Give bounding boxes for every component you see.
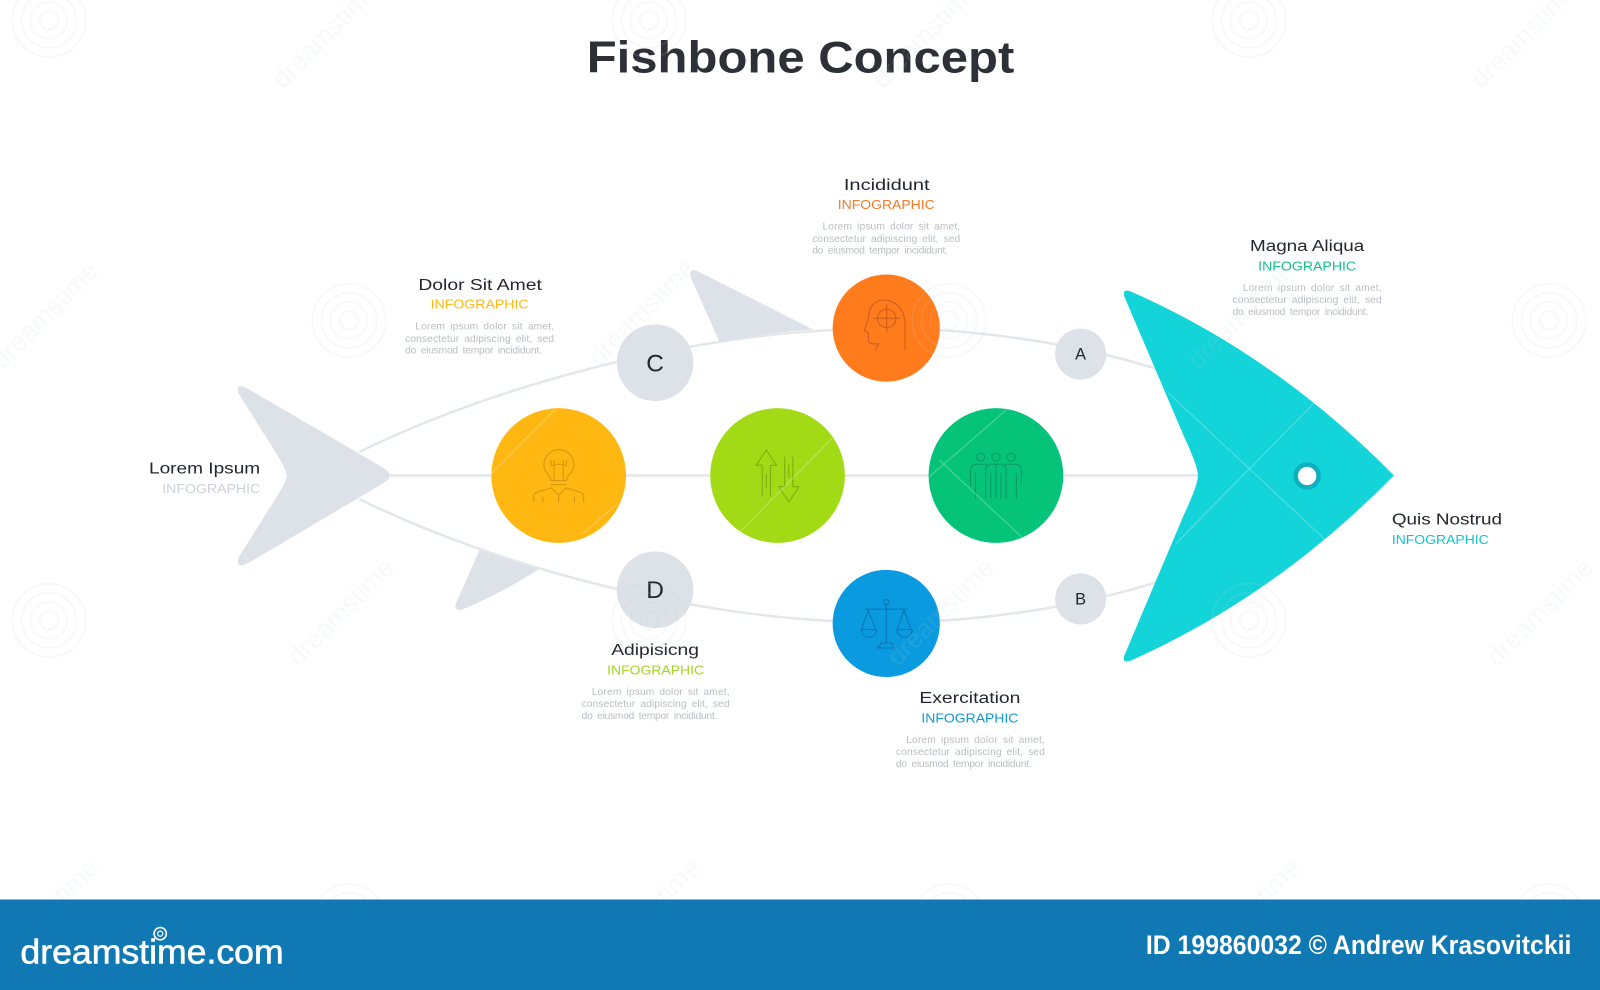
label: Dolor Sit Amet: INFOGRAPHIC (431, 297, 529, 312)
label: Lorem Ipsum: Lorem Ipsum (149, 460, 260, 477)
label: Adipisicng (582, 642, 730, 722)
circle: lime arrows (710, 408, 845, 543)
footer band (0, 899, 1600, 990)
icon: lightbulb person (534, 450, 584, 502)
label: Dolor Sit Amet: do eiusmod tempor incididunt. (405, 346, 542, 357)
fish head (1124, 291, 1394, 661)
tail fin (238, 386, 390, 565)
footer logo: dreamstime.com (20, 933, 284, 971)
badge B: B (1075, 591, 1086, 609)
label: Quis Nostrud: INFOGRAPHIC (1392, 532, 1489, 547)
label: Incididunt: Lorem ipsum dolor sit amet, (822, 222, 960, 233)
label: Exercitation: do eiusmod tempor incididunt. (896, 759, 1032, 770)
label: Incididunt: do eiusmod tempor incididunt. (812, 246, 948, 257)
icon: head with crosshair (864, 300, 905, 350)
text: dreamstime (1181, 255, 1300, 375)
icon: up and down arrows (756, 450, 799, 502)
label: Adipisicng: consectetur adipiscing elit, sed (582, 699, 730, 710)
label: Exercitation (896, 690, 1045, 770)
label: Quis Nostrud: Quis Nostrud (1392, 511, 1502, 528)
label: Dolor Sit Amet: Lorem ipsum dolor sit amet, (415, 322, 554, 333)
label: Incididunt: INFOGRAPHIC (838, 197, 935, 212)
label: Magna Aliqua (1233, 238, 1382, 318)
label: Magna Aliqua: Lorem ipsum dolor sit amet, (1243, 283, 1382, 294)
text: dreamstime (587, 852, 706, 972)
label: Dolor Sit Amet: consectetur adipiscing elit, sed (405, 334, 554, 345)
label: Quis Nostrud (1392, 511, 1502, 547)
circle: blue scales (833, 570, 940, 677)
text: dreamstime (1480, 552, 1599, 672)
label: Adipisicng: Adipisicng (611, 642, 699, 659)
lower fin (455, 550, 539, 610)
label: Lorem Ipsum (149, 460, 261, 496)
badge D (617, 552, 693, 628)
label: Lorem Ipsum: INFOGRAPHIC (162, 481, 261, 496)
label: Magna Aliqua: do eiusmod tempor incididunt. (1233, 307, 1368, 318)
badge D: D (646, 577, 664, 604)
label: Magna Aliqua: Magna Aliqua (1250, 238, 1365, 255)
label: Incididunt: consectetur adipiscing elit, sed (812, 234, 961, 245)
label: Adipisicng: INFOGRAPHIC (607, 662, 705, 677)
label: Incididunt: Incididunt (844, 177, 930, 194)
badge A (1055, 329, 1106, 380)
label: Adipisicng: Lorem ipsum dolor sit amet, (592, 687, 730, 698)
circle: green team (929, 408, 1063, 543)
fish eye (1293, 462, 1321, 490)
label: Adipisicng: do eiusmod tempor incididunt. (582, 711, 717, 722)
label: Exercitation: Lorem ipsum dolor sit amet, (906, 735, 1045, 746)
label: Exercitation: consectetur adipiscing elit, sed (896, 747, 1045, 758)
text: dreamstime (281, 552, 400, 672)
label: Dolor Sit Amet (405, 277, 554, 357)
upper fin (690, 270, 813, 342)
fish spine and ribs (359, 329, 1202, 622)
circle: yellow bulb (491, 408, 626, 543)
label: Magna Aliqua: consectetur adipiscing elit, sed (1233, 295, 1382, 306)
badge A: A (1075, 346, 1086, 364)
footer credit: ID 199860032 © Andrew Krasovitckii (1146, 930, 1571, 960)
icon: three people (970, 453, 1021, 498)
label: Dolor Sit Amet: Dolor Sit Amet (418, 277, 543, 294)
text: dreamstime (881, 552, 1000, 672)
badge C: C (646, 350, 664, 377)
label: Incididunt (812, 177, 961, 257)
text: dreamstime (1187, 852, 1306, 972)
text: dreamstime (582, 252, 701, 372)
title: Fishbone Concept (587, 31, 1014, 82)
icon: balance scales (861, 599, 912, 648)
badge B (1055, 573, 1106, 624)
label: Exercitation: INFOGRAPHIC (921, 710, 1019, 725)
label: Magna Aliqua: INFOGRAPHIC (1258, 258, 1357, 273)
circle: orange target head (833, 274, 940, 382)
label: Exercitation: Exercitation (919, 690, 1020, 707)
badge C (617, 324, 693, 401)
